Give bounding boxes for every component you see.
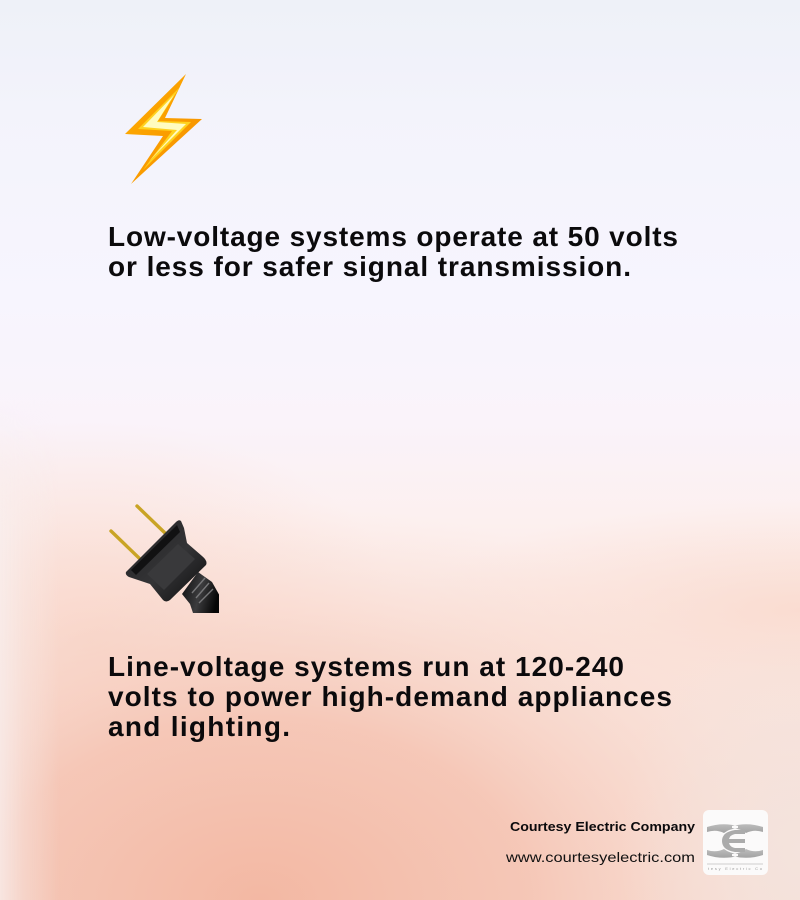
logo: tesy Electric Co	[708, 866, 763, 871]
footer: company name: Courtesy Electric Company	[510, 819, 696, 834]
heading: low-voltage text: or less for safer signal transmission.	[108, 251, 631, 282]
heading: line-voltage text: and lighting.	[108, 711, 290, 742]
icon: electric plug	[111, 506, 221, 616]
heading: line-voltage text: Line-voltage systems run at 120-240	[108, 651, 624, 682]
heading: line-voltage text	[108, 651, 672, 742]
plug body	[126, 520, 206, 602]
heading: low-voltage text: Low-voltage systems operate at 50 volts	[108, 221, 678, 252]
heading: low-voltage text	[108, 221, 678, 282]
footer: website: www.courtesyelectric.com	[505, 849, 695, 865]
heading: line-voltage text: volts to power high-demand appliances	[108, 681, 672, 712]
icon: lightning bolt	[125, 74, 202, 184]
logo	[703, 810, 768, 875]
plug cord	[182, 572, 219, 613]
